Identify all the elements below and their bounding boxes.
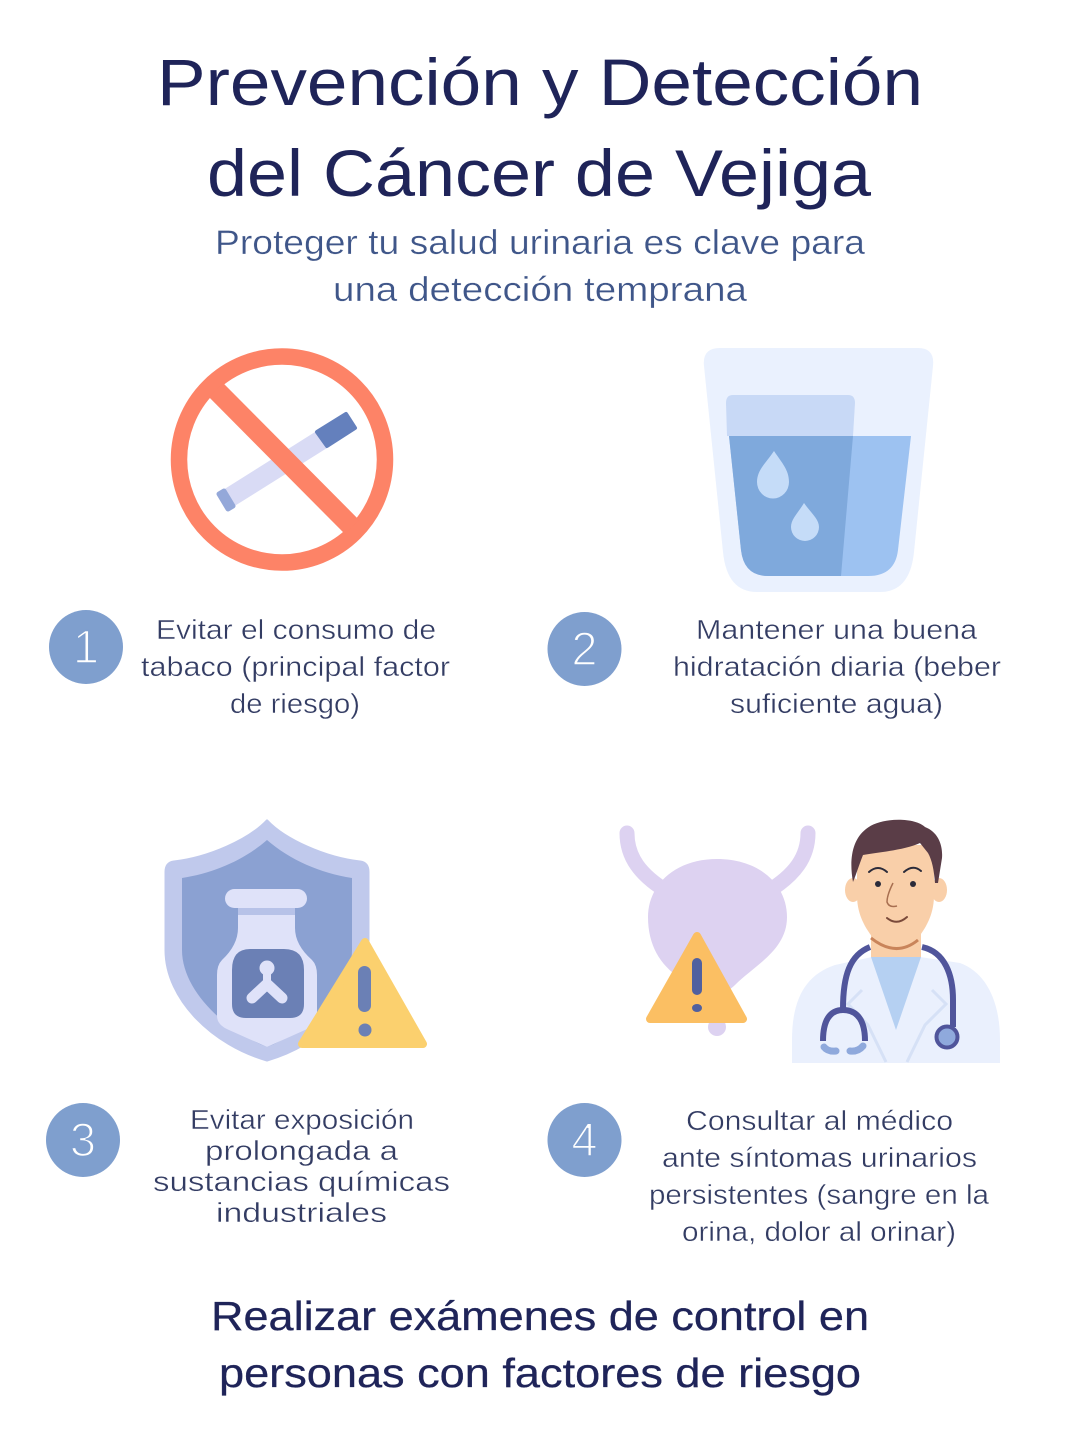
text: hidratación — [673, 614, 1001, 719]
icon: glass of water — [704, 348, 933, 592]
number badge 4: 4 — [571, 1113, 598, 1166]
text: sustancias químicas: industriales — [216, 1197, 387, 1228]
text: sustancias químicas: Evitar exposición — [190, 1104, 414, 1135]
text: sustancias químicas: prolongada a — [205, 1135, 399, 1166]
text: evitar tabaco — [141, 614, 450, 719]
icon: doctor — [792, 820, 1000, 1063]
text: consulta médica: Consultar al médico — [686, 1105, 953, 1136]
number badge 1: 1 — [73, 620, 99, 673]
number badge 2 — [548, 612, 622, 686]
closing message: Realizar exámenes de control en — [211, 1293, 869, 1339]
panel: evitar tabaco — [49, 356, 450, 719]
text: sustancias químicas: sustancias químicas — [153, 1166, 450, 1197]
icon: no smoking — [179, 356, 385, 562]
title: del Cáncer de Vejiga — [207, 136, 871, 210]
text: hidratación: Mantener una buena — [696, 614, 978, 645]
text: hidratación: suficiente agua) — [730, 688, 943, 719]
text: consulta médica: orina, dolor al orinar) — [682, 1216, 956, 1247]
closing message: personas con factores de riesgo — [219, 1350, 861, 1396]
number badge 4 — [548, 1103, 622, 1177]
icon: shield with chemical bottle — [166, 821, 423, 1060]
subtitle: Proteger tu salud urinaria es clave para — [215, 224, 865, 262]
subtitle: una detección temprana — [333, 271, 747, 309]
text: consulta médica — [649, 1105, 990, 1247]
panel: hidratación — [548, 348, 1001, 719]
text: sustancias químicas — [153, 1104, 450, 1228]
number badge 3: 3 — [70, 1113, 96, 1166]
subtitle — [215, 224, 865, 309]
panel: consulta médica — [548, 820, 1000, 1247]
number badge 2: 2 — [571, 622, 598, 675]
number badge 3 — [46, 1103, 120, 1177]
text: evitar tabaco: Evitar el consumo de — [156, 614, 436, 645]
closing message — [211, 1293, 869, 1396]
title: Prevención y Detección — [157, 45, 923, 119]
text: consulta médica: persistentes (sangre en la — [649, 1179, 990, 1210]
text: consulta médica: ante síntomas urinarios — [662, 1142, 977, 1173]
number badge 1 — [49, 610, 123, 684]
panel: sustancias químicas — [46, 821, 450, 1228]
icon: bladder with warning — [627, 833, 808, 1036]
text: hidratación: hidratación diaria (beber — [673, 651, 1001, 682]
text: evitar tabaco: tabaco (principal factor — [141, 651, 450, 682]
title — [157, 45, 923, 210]
text: evitar tabaco: de riesgo) — [230, 688, 360, 719]
